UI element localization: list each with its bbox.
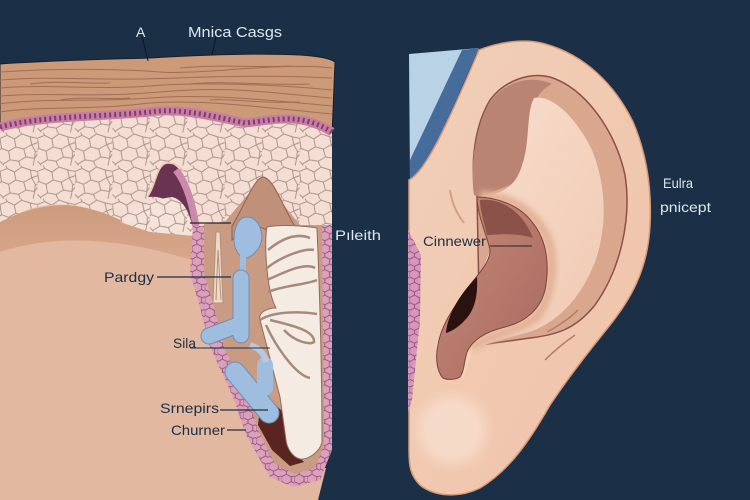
label: Mnica Casgs: Mnica Casgs — [188, 24, 282, 41]
narrow tube — [213, 232, 223, 303]
label: A: A — [136, 24, 146, 40]
white folded organ — [260, 225, 322, 459]
label: Eulra pnicept: Eulra — [663, 175, 693, 191]
brown peak — [232, 177, 296, 240]
cavity — [120, 163, 197, 236]
lower helix fold — [545, 310, 578, 360]
lobe highlight — [418, 396, 486, 464]
panel: outer ear — [408, 41, 650, 495]
label: A — [136, 24, 148, 61]
inner cavity tissue — [204, 178, 324, 474]
label: Pardgy: Pardgy — [104, 269, 154, 285]
flesh darker band — [0, 205, 197, 262]
ear silhouette — [409, 41, 650, 495]
concha halo — [470, 196, 552, 348]
upper concha shadow — [480, 200, 533, 238]
skin layer — [0, 54, 335, 135]
label: Eulra pnicept — [660, 175, 711, 215]
pink tissue strip — [408, 230, 421, 412]
label: Churner — [171, 422, 246, 438]
label: Sila: Sila — [173, 335, 196, 351]
flesh base — [0, 200, 326, 500]
panel: cross-section of tissue — [0, 54, 335, 500]
dark recess — [258, 392, 304, 466]
label: Srnepirs — [160, 400, 268, 416]
antihelix highlight — [443, 98, 604, 378]
label: Churner: Churner — [171, 422, 225, 438]
label: Srnepirs: Srnepirs — [160, 400, 219, 416]
label: Pardgy — [104, 269, 231, 285]
label: Cinnewer — [423, 233, 532, 249]
label: Mnica Casgs — [188, 24, 282, 55]
tragus fold — [450, 190, 464, 223]
scapha rim — [473, 76, 627, 345]
label: Sila — [173, 335, 270, 351]
label: Pileth: Pıleith — [335, 227, 381, 243]
ear canal — [446, 277, 477, 333]
pink membrane band — [0, 111, 332, 132]
pink pocket wall — [190, 225, 332, 487]
blue tissue patch — [409, 48, 479, 182]
upper concavity — [473, 80, 552, 197]
concha bowl — [437, 197, 547, 379]
leader line upper — [190, 222, 231, 224]
label: Eulra pnicept: pnicept — [660, 199, 711, 215]
label: Cinnewer: Cinnewer — [423, 233, 486, 249]
blue canal organ — [209, 217, 269, 413]
fat cell layer — [0, 113, 332, 236]
